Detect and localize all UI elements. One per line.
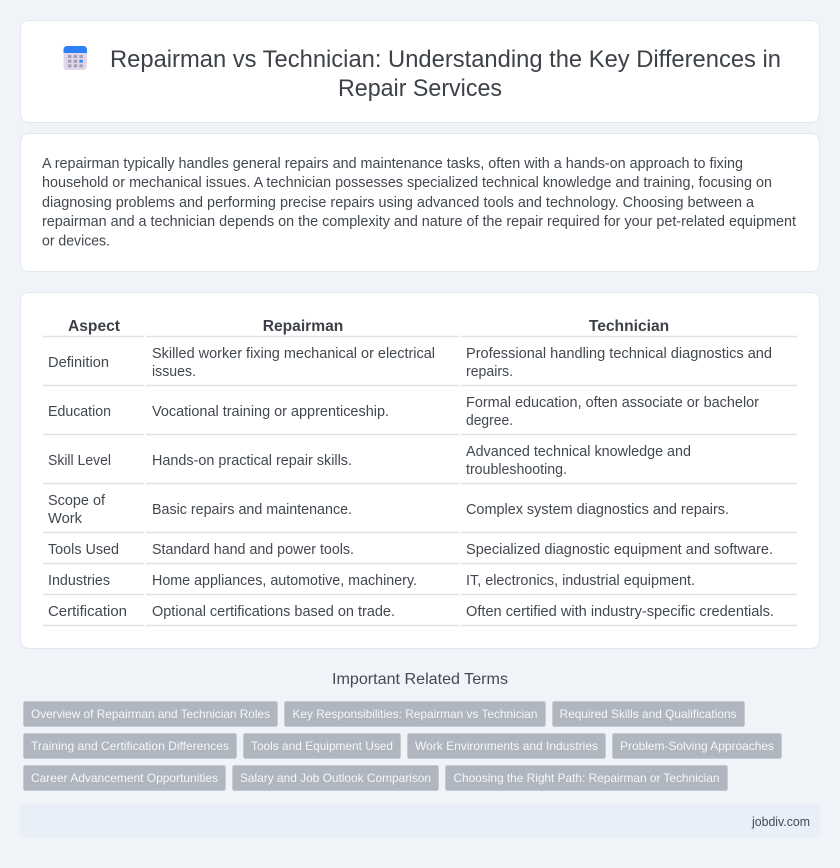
tag — [408, 734, 606, 758]
row: certification: Often certified with industry-specific credentials. — [466, 604, 774, 620]
panel: header — [20, 20, 820, 122]
tag — [244, 734, 400, 758]
row: definition: Definition — [48, 355, 109, 371]
row: definition: issues. — [152, 364, 196, 380]
text block: introduction: diagnosing problems and performing precise repairs using advanced tools and technology. Choosing between a — [42, 195, 754, 211]
table header: Technician — [589, 318, 669, 335]
tag: Problem-Solving Approaches — [620, 739, 774, 753]
table header: Aspect — [68, 318, 120, 335]
row: definition: Skilled worker fixing mechanical or electrical — [152, 346, 435, 362]
tag: Training and Certification Differences — [31, 739, 229, 753]
row: skill level: troubleshooting. — [466, 462, 567, 478]
footer: jobdiv.com — [751, 815, 810, 829]
tag — [232, 766, 438, 790]
text block: introduction: or devices. — [42, 234, 110, 250]
tag: Overview of Repairman and Technician Roles — [31, 707, 270, 721]
title: Repair Services — [338, 75, 502, 102]
panel: comparison table — [20, 292, 820, 648]
row: skill level: Skill Level — [48, 453, 111, 469]
text block: introduction: A repairman typically handles general repairs and maintenance tasks, often with a hands-on approach to fixing — [42, 156, 743, 172]
row: scope of work: Complex system diagnostics and repairs. — [466, 502, 729, 518]
row: skill level: Hands-on practical repair skills. — [152, 453, 352, 469]
tag: Work Environments and Industries — [415, 739, 598, 753]
row: definition — [48, 346, 772, 380]
text block: introduction: repairman and a technician depends on the complexity and nature of the repair required for your pet-related equipment — [42, 214, 796, 230]
icon: calendar — [64, 46, 87, 70]
row: education: Formal education, often associate or bachelor — [466, 395, 759, 411]
row: education: Education — [48, 404, 111, 420]
row: education — [48, 395, 759, 429]
row: scope of work: Work — [48, 511, 83, 527]
tag: Career Advancement Opportunities — [31, 771, 218, 785]
row: tools used: Specialized diagnostic equipment and software. — [466, 542, 773, 558]
row: skill level: Advanced technical knowledge and — [466, 444, 691, 460]
tag — [446, 766, 728, 790]
tag — [24, 702, 278, 726]
related term tags — [24, 702, 782, 790]
tag — [24, 766, 226, 790]
row: certification — [48, 604, 774, 620]
row: tools used: Tools Used — [48, 542, 119, 558]
tag: Required Skills and Qualifications — [560, 707, 736, 721]
row: industries: Industries — [48, 573, 110, 589]
row: certification: Certification — [48, 604, 127, 620]
row: scope of work: Scope of — [48, 493, 106, 509]
panel: introduction — [20, 134, 820, 272]
tag — [24, 734, 236, 758]
tag: Key Responsibilities: Repairman vs Technician — [292, 707, 538, 721]
row: tools used — [48, 542, 773, 558]
row: education: Vocational training or apprenticeship. — [152, 404, 389, 420]
row: certification: Optional certifications based on trade. — [152, 604, 395, 620]
heading: important related terms: Important Related Terms — [332, 671, 508, 688]
tag — [612, 734, 782, 758]
title — [110, 46, 781, 102]
row: definition: repairs. — [466, 364, 513, 380]
table header — [68, 318, 669, 335]
row: industries: IT, electronics, industrial equipment. — [466, 573, 695, 589]
title: Repairman vs Technician: Understanding the Key Differences in — [110, 46, 781, 73]
row: skill level — [48, 444, 691, 478]
row: scope of work: Basic repairs and maintenance. — [152, 502, 352, 518]
tag: Choosing the Right Path: Repairman or Technician — [454, 771, 720, 785]
row: industries — [48, 573, 695, 589]
row: tools used: Standard hand and power tools. — [152, 542, 354, 558]
tag — [552, 702, 744, 726]
row: definition: Professional handling technical diagnostics and — [466, 346, 772, 362]
row: education: degree. — [466, 413, 513, 429]
text block: introduction: household or mechanical issues. A technician possesses specialized technical knowledge and training, focusing on — [42, 175, 772, 191]
table header: Repairman — [263, 318, 343, 335]
text block: introduction — [42, 156, 796, 250]
tag: Tools and Equipment Used — [251, 739, 393, 753]
row: scope of work — [48, 493, 729, 527]
footer — [20, 804, 820, 838]
tag — [284, 702, 546, 726]
tag: Salary and Job Outlook Comparison — [240, 771, 431, 785]
row: industries: Home appliances, automotive, machinery. — [152, 573, 417, 589]
